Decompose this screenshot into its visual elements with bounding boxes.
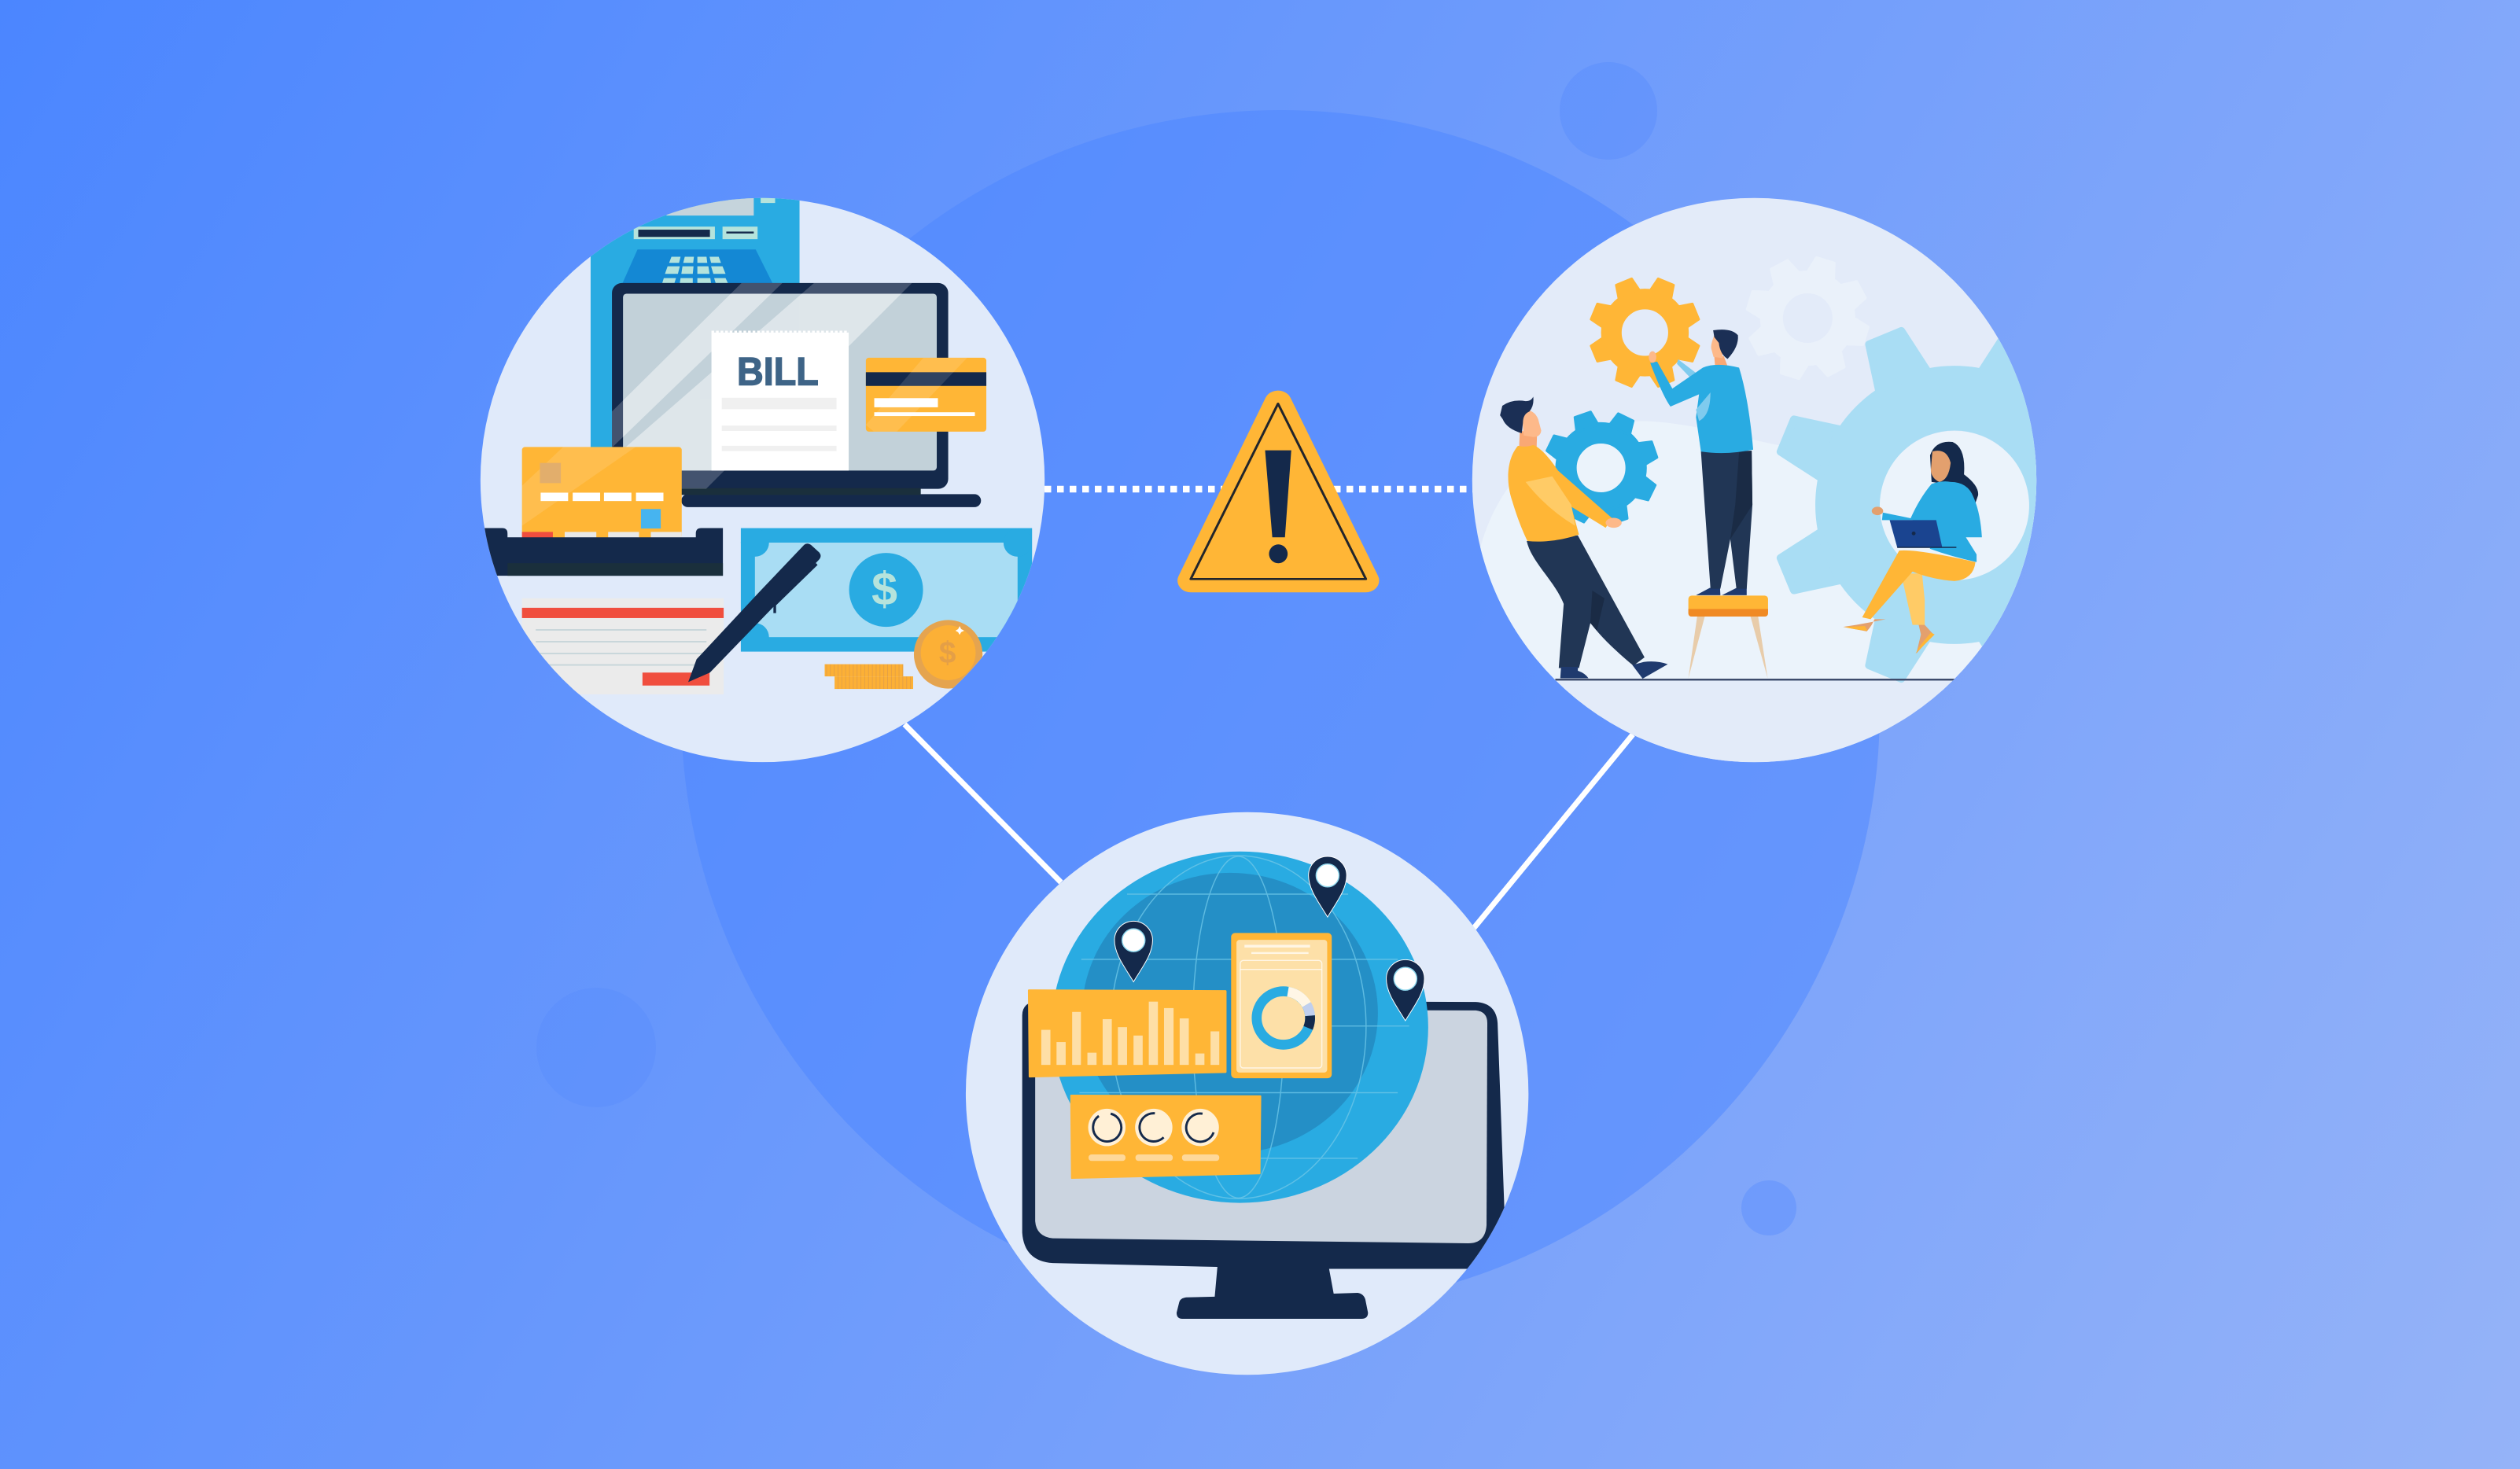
icon: location pin right xyxy=(1387,959,1424,1021)
icon: large light blue gear xyxy=(1778,328,2131,682)
chart: bar chart card xyxy=(1029,991,1225,1077)
icon: location pin top xyxy=(1309,856,1347,917)
icon: ATM machine xyxy=(591,196,800,455)
connector: line from team circle to monitor circle xyxy=(1474,734,1633,928)
connector: dotted line between bill and team circles xyxy=(1044,486,1479,492)
small decorative circle top xyxy=(1560,62,1657,160)
icon: location pin left xyxy=(1114,921,1152,981)
panel: bill payment circle xyxy=(476,196,1044,762)
small decorative circle right xyxy=(1741,1180,1796,1235)
icon: gold coin xyxy=(914,620,982,689)
panel: team with gears circle xyxy=(1472,198,2037,763)
chart: progress rings card xyxy=(1071,1095,1261,1178)
icon: stool xyxy=(1689,595,1768,679)
icon: banknote xyxy=(741,528,1032,652)
icon: bill receipt xyxy=(712,332,849,470)
panel: global data monitor circle xyxy=(966,812,1528,1375)
icon: card reader tray xyxy=(476,528,723,576)
icon: faint background gear xyxy=(1746,256,1869,380)
icon: small credit card xyxy=(866,358,986,432)
icon: coin stacks xyxy=(825,665,913,689)
ground line xyxy=(1555,679,1954,680)
icon: globe xyxy=(1052,852,1428,1203)
label: BILL: BILL xyxy=(737,348,819,393)
icon: large credit card in reader xyxy=(522,447,682,539)
icon: blue gear xyxy=(1544,411,1658,525)
chart: donut chart card xyxy=(1231,933,1332,1078)
icon: orange gear xyxy=(1590,278,1700,388)
figure: man carrying blue gear xyxy=(1500,396,1667,679)
small decorative circle left xyxy=(536,988,656,1107)
connector: line from bill circle to monitor circle xyxy=(904,724,1061,882)
label: dollar sign on note: $ xyxy=(871,562,897,615)
figure: woman with laptop xyxy=(1843,431,2029,654)
icon: warning triangle xyxy=(1191,403,1366,580)
icon: desktop monitor xyxy=(1022,1000,1505,1319)
icon: pen xyxy=(688,543,820,682)
icon: paper form xyxy=(522,598,724,694)
icon: laptop xyxy=(612,283,981,507)
large background circle xyxy=(681,110,1880,1309)
icon: gold coin: $ xyxy=(939,636,956,670)
figure: man on stool xyxy=(1649,330,1753,595)
